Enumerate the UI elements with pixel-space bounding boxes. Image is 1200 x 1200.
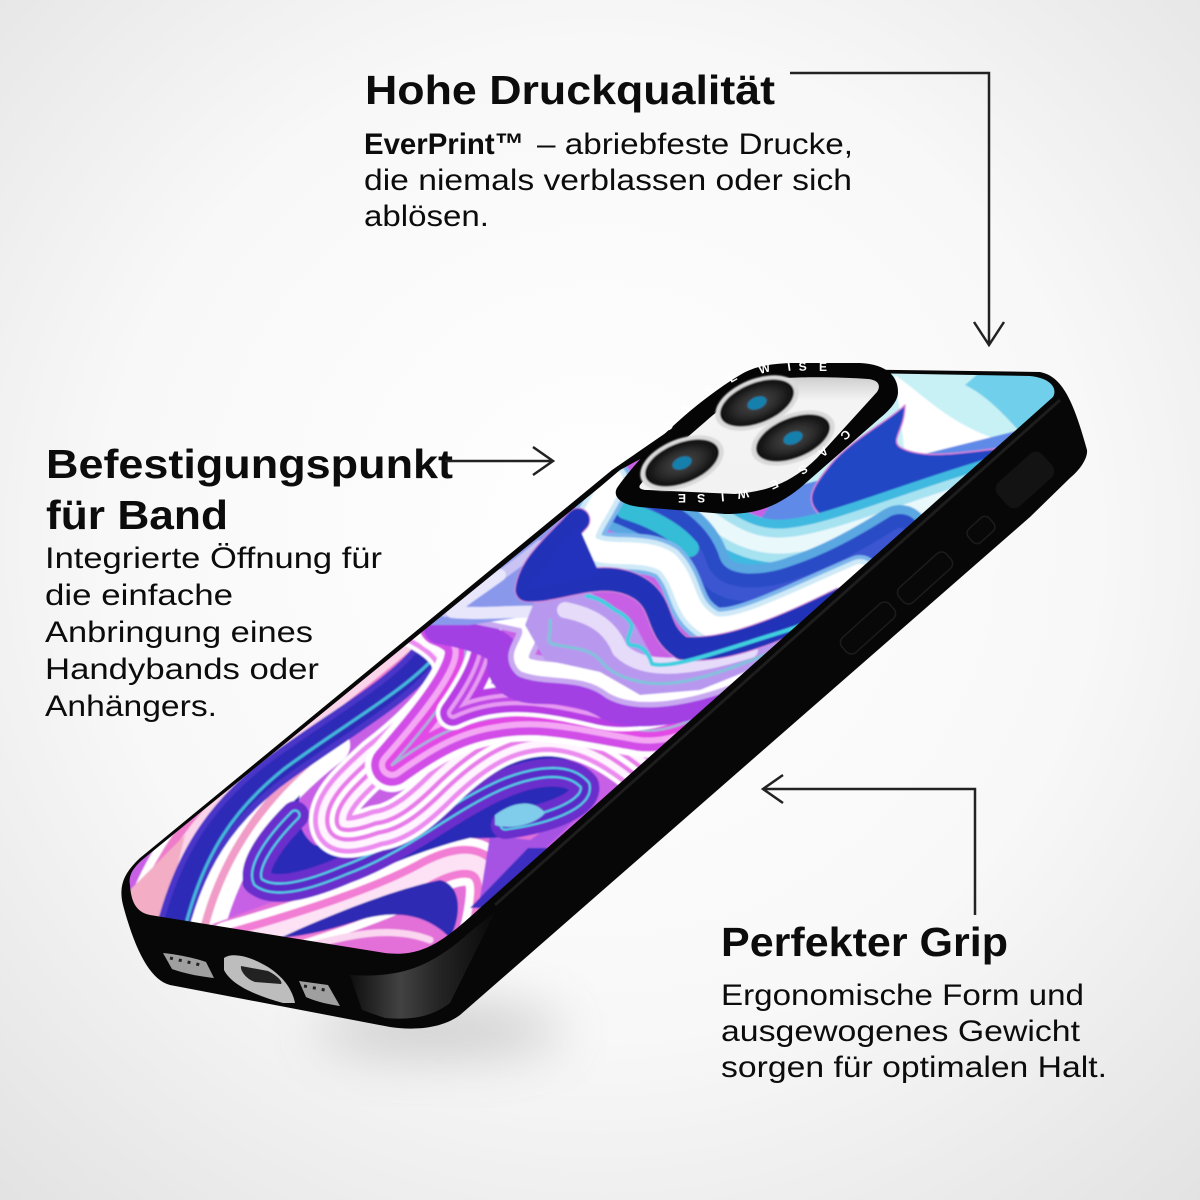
camera window — [639, 377, 879, 494]
edge stripes — [135, 646, 412, 884]
dark blue pool — [527, 520, 840, 649]
inner rim highlight — [495, 400, 1060, 905]
body text: Anhängers. — [45, 690, 217, 723]
body text — [364, 128, 853, 233]
magenta V inner — [435, 628, 668, 732]
brand text upper: C — [660, 418, 676, 434]
phone shadow — [315, 1004, 565, 1056]
body text: EverPrint™ — [364, 128, 524, 161]
purple loop shadow — [440, 628, 800, 711]
brand text lower: E — [678, 491, 686, 505]
brand text lower: C — [837, 427, 853, 443]
brand text lower: E — [767, 476, 781, 492]
brand text lower: S — [796, 462, 810, 478]
body text — [45, 542, 382, 723]
brand text upper — [660, 359, 827, 434]
body text — [721, 979, 1107, 1084]
white loop — [476, 616, 746, 708]
camera lens top — [707, 364, 807, 442]
magenta V outer — [364, 630, 692, 794]
body text: – abriebfeste Drucke, — [537, 128, 853, 161]
case body — [121, 368, 1087, 1029]
cyan fans — [690, 470, 1040, 546]
side lanyard panel — [992, 448, 1058, 512]
body text: sorgen für optimalen Halt. — [721, 1051, 1107, 1084]
right purple lobe — [478, 821, 572, 910]
brand text lower — [678, 427, 853, 505]
bottom magenta field — [210, 832, 539, 954]
periwinkle band — [762, 430, 1016, 521]
right lobe blue — [470, 848, 548, 908]
camera frame — [616, 363, 898, 514]
body text: Anbringung eines — [45, 616, 313, 649]
brand text lower: A — [815, 444, 831, 460]
brand text upper: E — [726, 369, 739, 386]
side button: mute — [965, 514, 997, 546]
usb port — [224, 955, 295, 1003]
brand text upper: S — [798, 359, 807, 374]
body text: die niemals verblassen oder sich — [364, 164, 852, 197]
light teal patch — [495, 803, 545, 827]
grey teal line — [549, 620, 790, 684]
heading — [46, 441, 453, 538]
heading: Befestigungspunkt — [46, 441, 453, 487]
brand text lower: I — [720, 490, 725, 504]
brand text upper: E — [819, 360, 827, 374]
speaker left — [163, 953, 214, 978]
callout: print quality — [364, 67, 853, 233]
heading: Perfekter Grip — [721, 919, 1008, 965]
heading: für Band — [46, 492, 228, 538]
brand text upper: A — [677, 401, 693, 417]
body text: ausgewogenes Gewicht — [721, 1015, 1081, 1048]
brand text lower: W — [736, 486, 750, 502]
camera lens left — [632, 424, 732, 502]
brand text lower: S — [697, 491, 705, 505]
phone case — [121, 368, 1087, 1029]
blue band — [610, 498, 900, 595]
bottom corner gloss — [350, 912, 495, 1019]
speaker right — [299, 981, 340, 1006]
body text: die einfache — [45, 579, 233, 612]
teal zigzag — [587, 596, 830, 665]
brand text upper: S — [702, 382, 716, 398]
body text: Integrierte Öffnung für — [45, 542, 382, 575]
bottom pink wave — [230, 862, 490, 975]
teal strip — [625, 510, 690, 548]
bottom stripes — [300, 932, 430, 948]
arrow: attachment point — [445, 447, 553, 475]
brand text upper: W — [757, 360, 772, 377]
side button: volume — [895, 549, 955, 607]
left corner pink — [128, 835, 185, 918]
top-right light marble — [803, 374, 1054, 486]
camera lens right — [743, 399, 843, 477]
dark blue core — [811, 405, 1012, 515]
purple core — [243, 754, 597, 898]
callout: grip — [721, 919, 1107, 1084]
body text: Handybands oder — [45, 653, 319, 686]
arrow: grip — [763, 775, 975, 915]
callout: attachment point — [45, 441, 453, 723]
magenta hook — [332, 625, 655, 835]
marble print — [130, 374, 1054, 954]
lavender field — [524, 592, 781, 696]
white wave — [584, 480, 860, 628]
left upper periwinkle — [430, 506, 577, 626]
camera island — [616, 359, 898, 514]
heading: Hohe Druckqualität — [365, 67, 775, 113]
body text: Ergonomische Form und — [721, 979, 1084, 1012]
body text: ablösen. — [364, 200, 489, 233]
white stripe beside core — [205, 745, 330, 925]
arrow: print quality — [790, 73, 1004, 345]
blue bottom arm — [280, 880, 458, 938]
side button: action — [838, 599, 898, 657]
left ribbon — [172, 652, 439, 930]
lavender highlight — [565, 610, 750, 666]
brand text upper: I — [786, 360, 792, 374]
